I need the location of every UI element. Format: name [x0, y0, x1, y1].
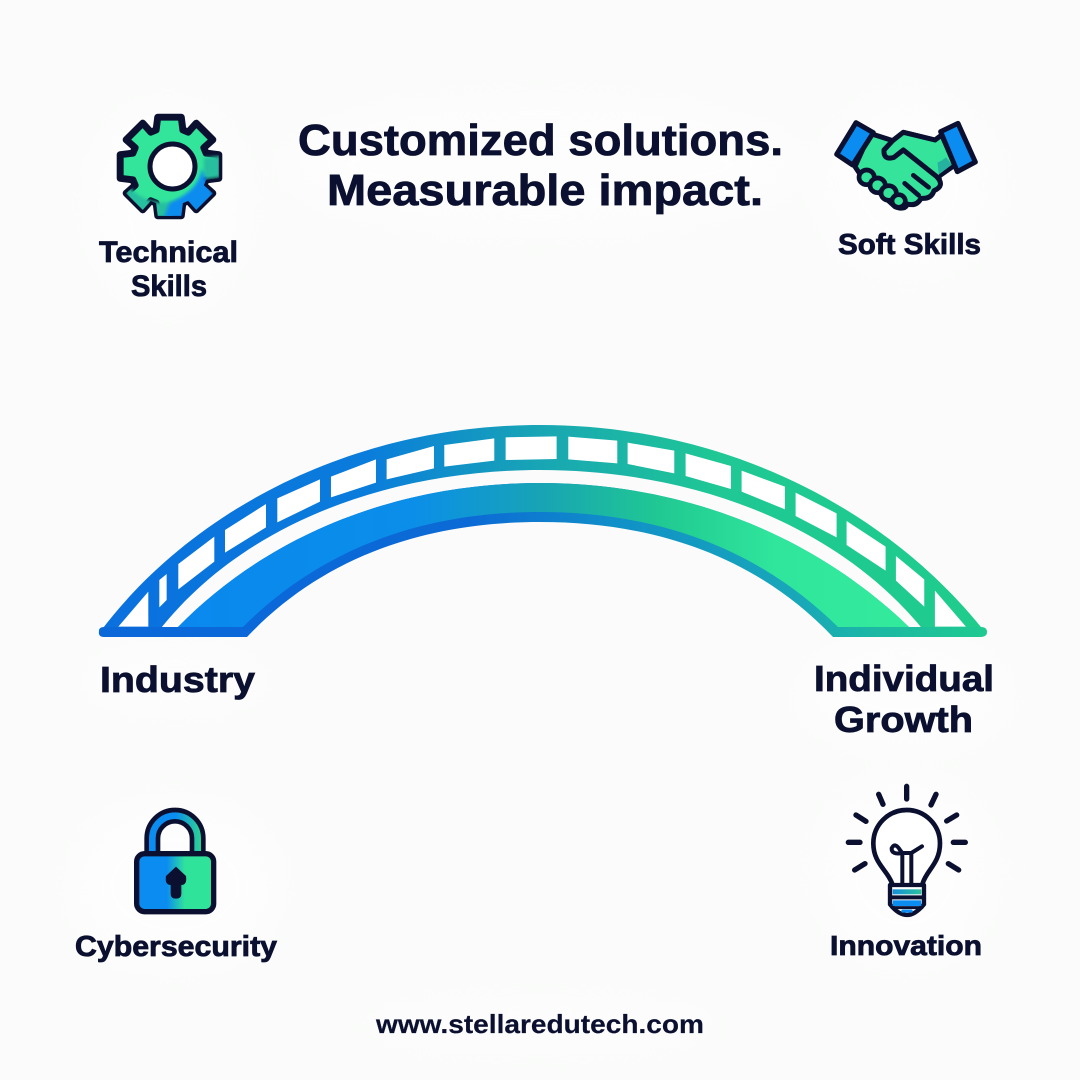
title: Customized solutions. [298, 116, 783, 165]
label: Technical Skills [99, 236, 238, 303]
label: Industry: Industry [100, 659, 255, 700]
rays [848, 786, 965, 870]
label: Cybersecurity: Cybersecurity [75, 931, 277, 963]
icon: gear (Technical Skills) [120, 117, 221, 220]
bridge deck underside [99, 483, 987, 637]
icon: handshake (Soft Skills) [837, 123, 975, 208]
label: Soft Skills: Soft Skills [838, 229, 981, 261]
website url: www.stellaredutech.com [375, 1009, 704, 1039]
title: Measurable impact. [327, 166, 763, 215]
background glow [70, 95, 1010, 1047]
label: Individual Growth: Growth [834, 699, 973, 740]
label: Individual Growth: Individual [814, 658, 994, 699]
label: Individual Growth [814, 658, 994, 740]
title [298, 116, 783, 215]
label: Innovation: Innovation [830, 930, 982, 961]
bridge [99, 425, 987, 637]
label: Technical Skills: Skills [131, 270, 207, 303]
bridge railing [100, 425, 985, 632]
bridge deck surface [178, 483, 909, 627]
icon: light bulb (Innovation) [848, 786, 965, 915]
label: Technical Skills: Technical [99, 236, 238, 269]
bridge railing windows [118, 436, 966, 627]
icon: padlock (Cybersecurity) [137, 816, 214, 912]
